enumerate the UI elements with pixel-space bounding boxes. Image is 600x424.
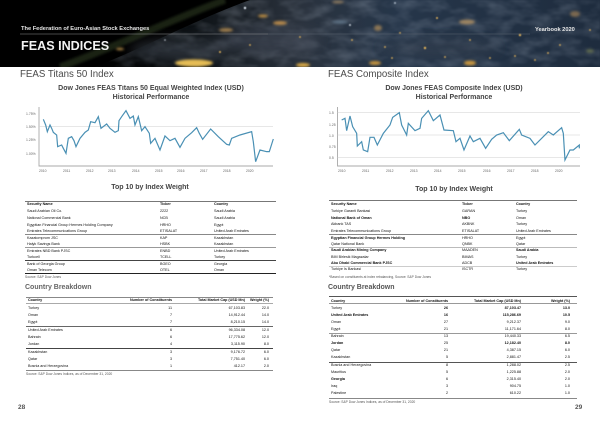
- table: right top 10: Oman: [516, 216, 526, 220]
- table: right top 10: GARAN: [462, 209, 475, 213]
- header banner: earth at night photo: [0, 0, 600, 67]
- table: right country breakdown: Georgia: [331, 377, 345, 381]
- table: right country breakdown: 9.0: [565, 320, 570, 324]
- table: right country breakdown: Mauritius: [331, 370, 346, 374]
- table: right country breakdown: United Arab Emirates: [331, 312, 368, 316]
- table: left top 10: Security Name: [27, 202, 53, 206]
- table: right country breakdown: 8: [446, 362, 448, 366]
- table: right country breakdown: 2.5: [565, 362, 570, 366]
- table: left top 10: KAP: [160, 236, 167, 240]
- right top-10 heading: Top 10 by Index Weight: [415, 186, 493, 192]
- table: left country breakdown: 412.17: [234, 364, 245, 368]
- left heading: FEAS Titans 50 Index: [20, 68, 114, 80]
- right line chart: [329, 107, 580, 173]
- table: left country breakdown: Oman: [28, 312, 38, 316]
- table: right top 10: ISCTR: [462, 267, 473, 271]
- table: right top 10: Egypt: [516, 236, 525, 240]
- table: left country breakdown: 7: [170, 312, 172, 316]
- table: left top 10: Bank of Georgia Group: [27, 262, 65, 266]
- table: left country breakdown: Turkey: [28, 306, 39, 310]
- table: right top 10: Security Name: [331, 202, 357, 206]
- page number left: 28: [18, 404, 25, 410]
- left line chart: 2020: [246, 169, 254, 173]
- table: right top 10: BIMAS: [462, 254, 473, 258]
- table: right country breakdown: 5: [446, 355, 448, 359]
- table: right top 10: *Based on constituents at index rebalancing, Source: S&P Dow Jones: [329, 274, 431, 278]
- left country breakdown heading: Country Breakdown: [25, 284, 92, 291]
- right chart title: Dow Jones FEAS Composite Index (USD): [385, 84, 523, 92]
- right chart title: Historical Performance: [416, 94, 492, 100]
- table: right top 10: Saudi Arabia: [516, 248, 538, 252]
- right line chart: 2018: [531, 169, 539, 173]
- table: left country breakdown: 6.0: [264, 356, 269, 360]
- right line chart: 1.5: [329, 111, 334, 115]
- left line chart: [26, 107, 274, 173]
- table: right country breakdown: 5: [446, 370, 448, 374]
- table: left top 10: Saudi Arabia: [214, 209, 235, 213]
- table: right top 10: Qatar National Bank: [331, 242, 364, 246]
- right line chart: 2016: [483, 169, 491, 173]
- left line chart: 2018: [223, 169, 231, 173]
- table: right country breakdown: 2: [446, 391, 448, 395]
- page title: FEAS INDICES: [21, 38, 109, 52]
- table: left top 10: [25, 201, 276, 279]
- table: right country breakdown: 1.0: [565, 391, 570, 395]
- table: right top 10: Turkey: [516, 222, 527, 226]
- table: left country breakdown: 3,115.90: [231, 342, 245, 346]
- table: left top 10: HRHO: [160, 222, 171, 226]
- table: right top 10: Turkiye Garanti Bankasi: [331, 209, 370, 213]
- table: right country breakdown: 27: [444, 320, 448, 324]
- table: left country breakdown: 67,103.83: [229, 306, 245, 310]
- left line chart: 1.25%: [26, 138, 36, 142]
- table: left top 10: BGEO: [160, 262, 171, 266]
- table: right top 10: BIM Birlesik Magazalar: [331, 254, 369, 258]
- table: left country breakdown: 17,775.62: [229, 334, 245, 338]
- table: left country breakdown: 1: [170, 364, 172, 368]
- right line chart: 2012: [386, 169, 394, 173]
- table: right country breakdown: Oman: [331, 320, 341, 324]
- table: left country breakdown: 9,176.72: [231, 350, 245, 354]
- left line chart: 2013: [108, 169, 116, 173]
- table: right country breakdown: Kazakhstan: [331, 355, 350, 359]
- right country breakdown heading: Country Breakdown: [328, 284, 395, 291]
- table: left country breakdown: 11: [168, 306, 172, 310]
- table: left country breakdown: 14,912.44: [229, 312, 245, 316]
- table: left country breakdown: Weight (%): [250, 298, 269, 302]
- table: left country breakdown: 7: [170, 320, 172, 324]
- table: left top 10: Saudi Arabia: [214, 216, 235, 220]
- table: right top 10: National Bank of Oman: [331, 216, 372, 220]
- table: right country breakdown: 25: [444, 341, 448, 345]
- table: right country breakdown: Bosnia and Herzegovina: [331, 362, 371, 366]
- table: left top 10: Georgia: [214, 262, 227, 266]
- table: right top 10: Qatar: [516, 242, 525, 246]
- table: left country breakdown: United Arab Emirates: [28, 328, 63, 332]
- left chart title: [58, 84, 244, 100]
- table: right top 10: Emirates Telecommunications Group: [331, 229, 391, 233]
- table: right top 10: United Arab Emirates: [516, 229, 551, 233]
- table: right country breakdown: Qatar: [331, 348, 340, 352]
- table: left top 10: Kazakhstan: [214, 236, 233, 240]
- right line chart: 2020: [555, 169, 563, 173]
- table: right country breakdown: 2.5: [565, 355, 570, 359]
- table: left country breakdown: Egypt: [28, 320, 37, 324]
- table: left top 10: Egyptian Financial Group Hermes Holding Company: [27, 222, 113, 226]
- table: left top 10: Oman Telecom: [27, 268, 52, 272]
- left line chart: 1.00%: [26, 152, 36, 156]
- table: left top 10: Egypt: [214, 222, 223, 226]
- table: left top 10: Turkey: [214, 254, 225, 258]
- left line chart: 2014: [132, 169, 140, 173]
- left line chart: 2016: [177, 169, 185, 173]
- table: left country breakdown: Bahrain: [28, 334, 41, 338]
- table: left top 10: Turkcell: [27, 254, 40, 258]
- table: left country breakdown: Total Market Cap (USD Mn): [198, 298, 245, 302]
- table: left top 10: United Arab Emirates: [214, 248, 249, 252]
- table: left country breakdown: 22.0: [262, 306, 269, 310]
- table: right country breakdown: 904.75: [510, 384, 521, 388]
- table: left top 10: ENBD: [160, 248, 170, 252]
- table: right top 10: Egyptian Financial Group Hermes Holding: [331, 236, 405, 240]
- right heading: FEAS Composite Index: [328, 68, 429, 80]
- table: right country breakdown: 3: [446, 384, 448, 388]
- table: left country breakdown: 4: [170, 342, 172, 346]
- yearbook label: Yearbook 2020: [535, 27, 575, 33]
- table: right top 10: Saudi Arabian Mining Company: [331, 248, 386, 252]
- left line chart: 2011: [63, 169, 70, 173]
- table: left country breakdown: 14.0: [262, 312, 269, 316]
- table: left top 10: Ticker: [160, 202, 171, 206]
- table: right top 10: Turkiye Is Bankasi: [331, 267, 361, 271]
- table: right country breakdown: 13: [444, 334, 448, 338]
- table: right country breakdown: 6.5: [565, 334, 570, 338]
- table: right country breakdown: 4,387.15: [507, 348, 521, 352]
- table: right country breakdown: 2.0: [565, 370, 570, 374]
- table: left country breakdown: 12.0: [262, 334, 269, 338]
- table: left country breakdown: 8.0: [264, 342, 269, 346]
- table: right country breakdown: 13.0: [563, 306, 570, 310]
- table: right top 10: Turkey: [516, 254, 527, 258]
- table: right top 10: HRHO: [462, 236, 473, 240]
- table: left country breakdown: Qatar: [28, 356, 37, 360]
- table: right country breakdown: 6.0: [565, 348, 570, 352]
- table: right country breakdown: 610.22: [510, 391, 521, 395]
- table: right top 10: MAADEN: [462, 248, 478, 252]
- table: left country breakdown: [26, 297, 273, 376]
- table: right top 10: QNBK: [462, 242, 472, 246]
- table: left country breakdown: Jordan: [28, 342, 39, 346]
- right line chart: 0.5: [329, 156, 334, 160]
- table: right top 10: Ticker: [462, 202, 473, 206]
- table: right country breakdown: 10.5: [563, 312, 570, 316]
- table: right country breakdown: [329, 296, 577, 404]
- table: right country breakdown: Jordan: [331, 341, 343, 345]
- table: left top 10: Halyk Savings Bank: [27, 242, 60, 246]
- table: right country breakdown: 21: [444, 348, 448, 352]
- table: left country breakdown: 3: [170, 350, 172, 354]
- table: right country breakdown: 2.0: [565, 377, 570, 381]
- table: left country breakdown: 8,210.15: [231, 320, 245, 324]
- table: left top 10: Kazakhstan: [214, 242, 233, 246]
- table: left country breakdown: Kazakhstan: [28, 350, 47, 354]
- page number right: 29: [575, 404, 582, 410]
- table: left top 10: TCELL: [160, 254, 171, 258]
- table: right top 10: Akbank TAS: [331, 222, 351, 226]
- left chart title: Dow Jones FEAS Titans 50 Equal Weighted Index (USD): [58, 84, 244, 92]
- table: right country breakdown: 2,315.40: [507, 377, 521, 381]
- right chart title: [385, 84, 523, 100]
- table: right top 10: Abu Dhabi Commercial Bank PJSC: [331, 261, 392, 265]
- table: right country breakdown: 11,171.64: [505, 326, 521, 330]
- table: left top 10: Emirates NBD Bank PJSC: [27, 248, 70, 252]
- table: right country breakdown: 8.0: [565, 326, 570, 330]
- table: right country breakdown: 1,288.02: [507, 362, 521, 366]
- table: right country breakdown: 87,103.47: [505, 306, 521, 310]
- table: right country breakdown: 6: [446, 377, 448, 381]
- table: left top 10: Country: [214, 202, 228, 206]
- right line chart: 2017: [507, 169, 515, 173]
- table: right country breakdown: Bahrain: [331, 334, 344, 338]
- table: left top 10: Saudi Arabian Oil Co.: [27, 209, 62, 213]
- table: right country breakdown: 26: [444, 306, 448, 310]
- right line chart: 1.0: [329, 134, 334, 138]
- right line chart: 2015: [458, 169, 466, 173]
- table: left top 10: NCB: [160, 216, 168, 220]
- table: right top 10: NBO: [462, 216, 470, 220]
- left line chart: 2010: [39, 169, 47, 173]
- table: left top 10: Source: S&P Dow Jones: [25, 275, 61, 279]
- right line chart: 1.25: [329, 123, 336, 127]
- table: right country breakdown: Iraq: [331, 384, 337, 388]
- table: left country breakdown: 12.0: [262, 328, 269, 332]
- table: left top 10: United Arab Emirates: [214, 229, 249, 233]
- left line chart: 1.75%: [26, 112, 36, 116]
- left line chart: 2012: [86, 169, 94, 173]
- table: right country breakdown: 1.0: [565, 384, 570, 388]
- table: left country breakdown: 6: [170, 328, 172, 332]
- table: left top 10: Kazatomprom JSC: [27, 236, 58, 240]
- table: right country breakdown: Palestine: [331, 391, 346, 395]
- table: left country breakdown: 3: [170, 356, 172, 360]
- table: right top 10: Country: [516, 202, 530, 206]
- table: right country breakdown: Weight (%): [551, 298, 570, 302]
- table: right top 10: Turkey: [516, 209, 527, 213]
- table: left country breakdown: 96,334.08: [229, 328, 245, 332]
- table: right country breakdown: 2,881.47: [507, 355, 521, 359]
- table: left top 10: National Commercial Bank: [27, 216, 71, 220]
- table: left top 10: Emirates Telecommunications Group: [27, 229, 87, 233]
- table: right country breakdown: 115,286.69: [503, 312, 521, 316]
- table: right top 10: [329, 200, 577, 279]
- table: right country breakdown: 1,225.88: [507, 370, 521, 374]
- table: right top 10: AKBNK: [462, 222, 475, 226]
- table: right top 10: ETISALAT: [462, 229, 479, 233]
- table: right country breakdown: Source: S&P Dow Jones Indices, as of December 31, 2020: [329, 400, 415, 404]
- table: left top 10: ETISALAT: [160, 229, 177, 233]
- right line chart: 2014: [434, 169, 442, 173]
- right line chart: 2013: [410, 169, 418, 173]
- organisation name: The Federation of Euro-Asian Stock Exchanges: [21, 26, 149, 32]
- table: left top 10: Oman: [214, 268, 224, 272]
- table: left top 10: OTEL: [160, 268, 170, 272]
- table: right country breakdown: 8.0: [565, 341, 570, 345]
- table: left country breakdown: Number of Constituents: [130, 298, 172, 302]
- table: right top 10: Turkey: [516, 267, 527, 271]
- table: left country breakdown: 6.0: [264, 350, 269, 354]
- left line chart: 2015: [155, 169, 163, 173]
- left line chart: 1.50%: [26, 125, 36, 129]
- table: left country breakdown: 2.0: [264, 364, 269, 368]
- table: right country breakdown: 16: [444, 312, 448, 316]
- left chart title: Historical Performance: [113, 94, 189, 100]
- table: left country breakdown: Country: [28, 298, 42, 302]
- table: right country breakdown: Total Market Cap (USD Mn): [474, 298, 521, 302]
- table: right country breakdown: 21: [444, 326, 448, 330]
- table: left country breakdown: Source: S&P Dow Jones Indices, as of December 31, 2020: [26, 372, 112, 376]
- left top-10 heading: Top 10 by Index Weight: [111, 184, 189, 190]
- table: left country breakdown: Bosnia and Herzegovina: [28, 364, 68, 368]
- left line chart: 2017: [200, 169, 208, 173]
- table: right country breakdown: Number of Constituents: [406, 298, 448, 302]
- table: left country breakdown: 14.0: [262, 320, 269, 324]
- table: right country breakdown: 9,212.37: [507, 320, 521, 324]
- table: right country breakdown: Egypt: [331, 326, 340, 330]
- table: right country breakdown: Turkey: [331, 306, 342, 310]
- right line chart: 2011: [362, 169, 369, 173]
- table: right country breakdown: 19,440.33: [505, 334, 521, 338]
- right line chart: 0.75: [329, 145, 336, 149]
- table: left top 10: 2222: [160, 209, 168, 213]
- table: right country breakdown: Country: [331, 298, 345, 302]
- table: left top 10: HSBK: [160, 242, 170, 246]
- table: right top 10: United Arab Emirates: [516, 261, 553, 265]
- table: left country breakdown: 7,751.40: [231, 356, 245, 360]
- table: left country breakdown: 6: [170, 334, 172, 338]
- table: right top 10: ADCB: [462, 261, 472, 265]
- right line chart: 2010: [338, 169, 346, 173]
- table: right country breakdown: 12,182.40: [505, 341, 521, 345]
